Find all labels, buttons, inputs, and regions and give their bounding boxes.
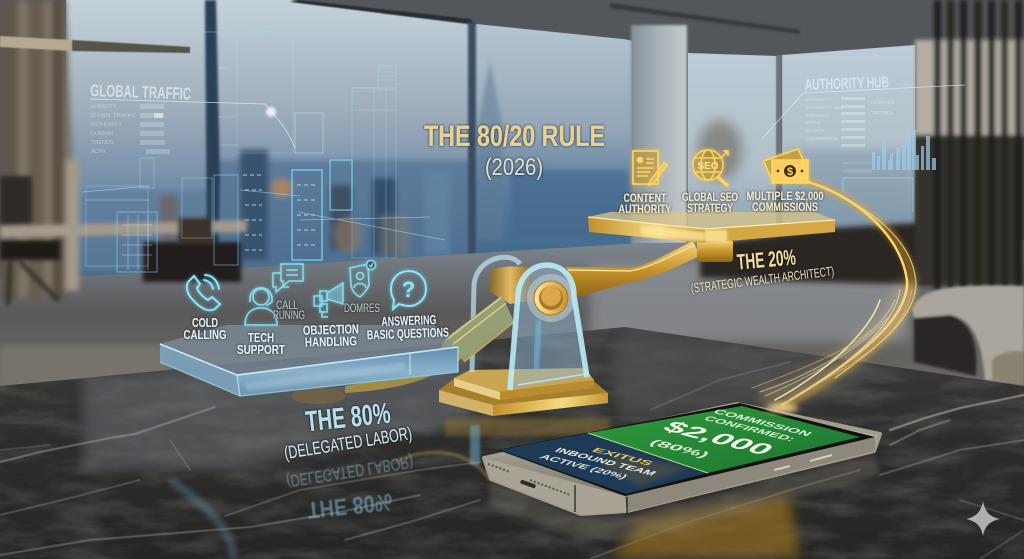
right slatted wall — [915, 0, 1024, 290]
commission text: CONFIRMED: — [701, 415, 797, 443]
label: the 20%: (STRATEGIC WEALTH ARCHITECT) — [690, 263, 835, 296]
right windows — [688, 53, 778, 250]
data rows: AUTHORITY — [805, 97, 832, 102]
gold base plate — [439, 368, 608, 416]
icon: objection handling megaphone — [314, 283, 343, 317]
phone body — [484, 404, 880, 514]
labels: delegated tasks: HANDLING — [305, 333, 357, 350]
inbound team text: ACTIVE (20%) — [536, 454, 629, 481]
labels: delegated tasks: ANSWERING — [381, 312, 437, 329]
stream impact glow — [766, 403, 798, 413]
marble veins — [0, 362, 1024, 559]
icon: content authority — [633, 151, 667, 185]
left platform: glass tray — [160, 325, 458, 404]
title: THE 80/20 RULE — [424, 120, 605, 153]
mullions — [205, 0, 220, 270]
icon: multiple commissions — [764, 149, 808, 183]
label: the 20%: THE 20% — [736, 245, 797, 275]
icon: multiple commissions: $ — [787, 166, 793, 178]
commission text — [646, 408, 813, 459]
commission text: (80%) — [646, 438, 713, 459]
data rows: GLOBAL TRAFFIC — [90, 113, 136, 119]
icon: global seo strategy: SEO — [697, 161, 719, 172]
curtains — [0, 0, 79, 300]
label: the 80%: THE 80% — [304, 398, 392, 438]
labels: delegated tasks: TECH — [248, 330, 274, 345]
label: the 20% — [690, 245, 835, 296]
labels: strategic tasks: MULTIPLE $2,000 — [746, 189, 824, 203]
data rows: SEARCH — [805, 128, 824, 133]
gold money stream arrow — [752, 182, 916, 407]
data rows: STRATEGY — [805, 113, 829, 118]
labels: strategic tasks — [618, 189, 824, 216]
labels: strategic tasks: GLOBAL SEO — [682, 190, 738, 204]
labels: strategic tasks: STRATEGY — [687, 201, 733, 215]
icon: global seo strategy — [693, 150, 728, 186]
data rows: BRAND — [805, 120, 822, 125]
reflection: delegated labor — [285, 452, 415, 523]
data rows: ACPX — [91, 149, 106, 155]
armchair — [912, 286, 1024, 385]
ceiling — [290, 0, 1024, 56]
data rows: DOMAIN — [91, 131, 113, 137]
floor — [0, 240, 1024, 400]
panel: global traffic hologram — [90, 81, 191, 155]
data rows: HUMIDITY — [90, 104, 117, 110]
inbound team text: INBOUND TEAM — [552, 447, 658, 477]
label: the 80% — [283, 398, 413, 463]
labels: delegated tasks: OBJECTION — [303, 321, 359, 338]
smartphone — [484, 403, 880, 540]
labels: delegated tasks: DOMRES — [344, 301, 380, 315]
data rows: METRICS — [873, 110, 894, 115]
labels: delegated tasks: COLD — [192, 315, 218, 330]
icon: answering questions bubble: ? — [402, 277, 415, 302]
icon: cold calling phone — [187, 275, 220, 310]
heading: authority hub: AUTHORITY HUB — [805, 74, 889, 94]
labels: delegated tasks: CALL — [276, 298, 298, 312]
data rows — [90, 104, 170, 155]
labels: delegated tasks: BASIC QUESTIONS — [367, 325, 449, 342]
commission text: COMMISSION — [710, 408, 813, 438]
left gold arm — [345, 296, 512, 393]
reflection: delegated labor: (DELEGATED LABOR) — [285, 452, 415, 491]
title — [424, 120, 605, 181]
gold pivot — [527, 274, 575, 322]
back glass arch — [472, 257, 520, 372]
bar chart — [872, 130, 936, 170]
heading: global traffic: GLOBAL TRAFFIC — [90, 81, 191, 104]
hologram glint — [266, 107, 276, 117]
data rows: AUTHORITY — [90, 122, 122, 128]
phone screen — [498, 403, 875, 496]
data rows: AUTHORITY SEO — [805, 105, 843, 110]
labels: delegated tasks: SUPPORT — [237, 342, 285, 357]
labels: delegated tasks — [184, 298, 449, 357]
marble table — [0, 320, 1024, 559]
labels: delegated tasks: RUNING — [273, 308, 305, 322]
label: the 80%: (DELEGATED LABOR) — [283, 423, 413, 463]
labels: strategic tasks: COMMISSIONS — [752, 200, 818, 214]
front glass frame — [510, 265, 587, 390]
panel: authority hub hologram — [762, 74, 965, 212]
icon: call tuning chat bubbles — [273, 264, 303, 292]
plant behind icons — [698, 120, 742, 180]
data rows: TRENDS — [91, 140, 114, 146]
ceiling lamp bar — [0, 36, 190, 53]
icon: answering questions bubble — [391, 271, 426, 309]
gold axle — [490, 266, 535, 304]
title: (2026) — [485, 154, 543, 181]
inbound team text — [536, 447, 658, 481]
right gold arm — [566, 241, 700, 297]
icon: tech support agent — [245, 288, 277, 325]
icon: domres shield — [350, 260, 376, 297]
data rows: CONVERSIONS — [805, 136, 839, 141]
chair and desk — [0, 176, 247, 305]
gold reflection on marble — [612, 495, 800, 559]
labels: strategic tasks: AUTHORITY — [618, 202, 672, 216]
labels: delegated tasks: CALLING — [184, 327, 226, 342]
labels: strategic tasks: CONTENT — [624, 191, 667, 205]
phone reflection — [490, 455, 880, 540]
data rows — [805, 97, 895, 147]
icon: sparkle watermark — [966, 501, 1000, 536]
holographic city wireframe — [82, 30, 445, 272]
inbound team text: EXITUS — [589, 447, 655, 467]
commission text: $2,000 — [656, 418, 779, 458]
reflection: delegated labor: THE 80% — [306, 488, 393, 523]
scale fulcrum base — [345, 241, 700, 416]
dark furniture behind shelf — [700, 222, 935, 285]
data rows: INSIGHTS — [873, 100, 895, 105]
column — [631, 25, 687, 250]
right platform: gold shelf — [588, 212, 835, 262]
window: left city view — [66, 0, 632, 285]
